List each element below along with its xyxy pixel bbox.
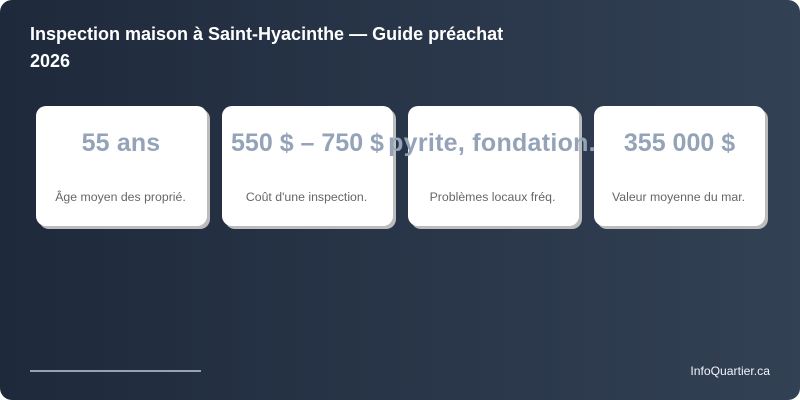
value: age: 55 ans <box>82 129 160 157</box>
value: cost: 550 $ – 750 $ <box>231 129 384 157</box>
label: age: Âge moyen des proprié. <box>55 190 186 204</box>
card: inspection cost <box>222 106 393 226</box>
card: local problems <box>408 106 579 226</box>
footer brand: InfoQuartier.ca <box>690 364 770 378</box>
title: Inspection maison à Saint-Hyacinthe — Guide préachat 2026 <box>30 24 503 71</box>
card: average owner age <box>36 106 207 226</box>
footer rule <box>30 370 201 372</box>
label: problems: Problèmes locaux fréq. <box>430 190 555 204</box>
value: market: 355 000 $ <box>624 129 735 157</box>
label: market: Valeur moyenne du mar. <box>612 190 745 204</box>
card: market value <box>594 106 765 226</box>
value: problems: pyrite, fondation. <box>388 129 596 157</box>
label: cost: Coût d'une inspection. <box>246 190 367 204</box>
